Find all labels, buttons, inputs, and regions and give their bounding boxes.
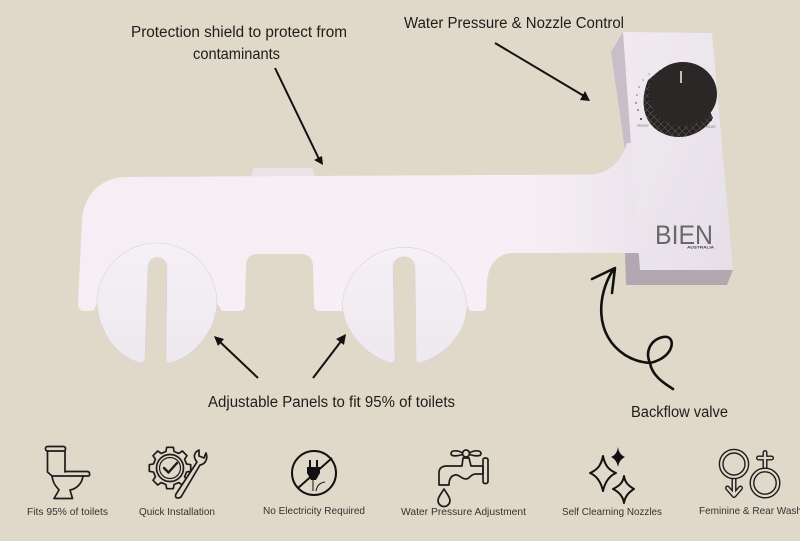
control box side face bbox=[611, 32, 640, 150]
adjustable panel right bbox=[342, 247, 467, 363]
arrow: left panel bbox=[214, 336, 258, 378]
heading: backflow valve: Backflow valve bbox=[631, 404, 728, 421]
arrow: backflow valve bbox=[592, 268, 673, 389]
caption: No Electricity Required bbox=[263, 505, 365, 517]
feature: water pressure adjustment bbox=[401, 450, 526, 518]
icon: faucet bbox=[438, 450, 488, 507]
mounting plate bbox=[78, 143, 640, 311]
caption: Quick Installation bbox=[139, 506, 215, 518]
icon: toilet bbox=[46, 446, 90, 498]
feature: fits 95% of toilets bbox=[27, 446, 108, 518]
dial markings bbox=[635, 74, 716, 129]
arrow: right panel bbox=[313, 334, 346, 378]
heading: protection shield bbox=[131, 24, 347, 63]
caption: Self Clearning Nozzles bbox=[562, 506, 662, 518]
icon: crossed plug bbox=[292, 451, 336, 495]
caption: Water Pressure Adjustment bbox=[401, 506, 526, 518]
adjustable panel left bbox=[97, 243, 217, 363]
heading: adjustable panels: Adjustable Panels to fit 95% of toilets bbox=[208, 394, 455, 411]
heading: protection shield: Protection shield to protect from bbox=[131, 24, 347, 41]
caption: Fits 95% of toilets bbox=[27, 506, 108, 518]
feature: feminine and rear wash bbox=[699, 451, 800, 517]
dial markings: REAR bbox=[706, 125, 716, 129]
heading: water pressure and nozzle control: Water Pressure & Nozzle Control bbox=[404, 15, 624, 32]
protection shield tab bbox=[252, 168, 314, 176]
heading: protection shield: contaminants bbox=[193, 46, 280, 63]
bidet product bbox=[78, 32, 733, 363]
control knob bbox=[644, 62, 717, 137]
icon: sparkles bbox=[590, 447, 634, 503]
control box front face bbox=[623, 32, 733, 270]
brand logo: BIEN bbox=[655, 220, 713, 250]
icon: gear and wrench bbox=[149, 447, 207, 498]
feature: no electricity required bbox=[263, 451, 365, 517]
feature: self cleaning nozzles bbox=[562, 447, 662, 518]
arrow: nozzle control bbox=[495, 43, 590, 101]
brand logo: AUSTRALIA bbox=[687, 244, 714, 250]
dial markings: FRONT bbox=[637, 124, 650, 128]
backflow valve housing bbox=[625, 252, 733, 285]
icon: gender symbols bbox=[721, 451, 778, 496]
feature: quick installation bbox=[139, 447, 215, 518]
arrow: protection shield bbox=[275, 68, 323, 165]
